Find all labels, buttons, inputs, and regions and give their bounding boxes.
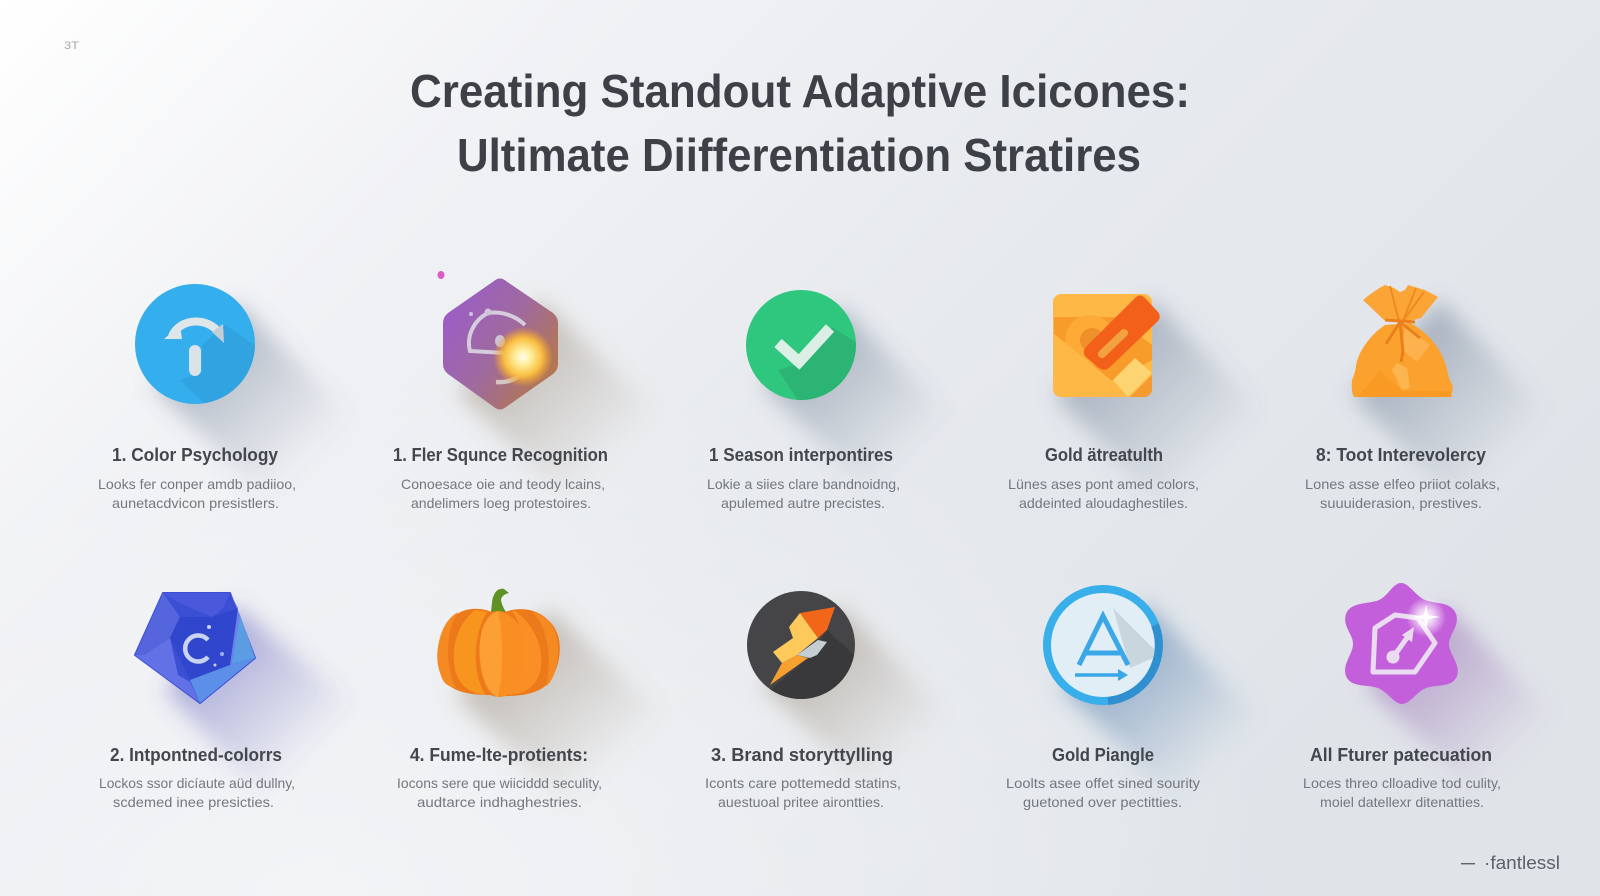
- description: auestuoal pritee airontties.: [718, 794, 884, 810]
- description: audtarce indhaghestries.: [417, 794, 582, 810]
- heading: 1. Color Psychology: [112, 445, 278, 465]
- description: suuuiderasion, prestives.: [1320, 495, 1482, 511]
- title: Ultimate Diifferentiation Stratires: [457, 129, 1141, 181]
- description: aunetacdvicon presistlers.: [112, 495, 279, 511]
- description: Loces threo clloadive tod culity,: [1303, 775, 1501, 791]
- description: Iconts care pottemedd statins,: [705, 775, 901, 791]
- description: addeinted aloudaghestiles.: [1019, 495, 1188, 511]
- panel: card 2 flare recognition: [393, 271, 655, 511]
- description: [705, 775, 901, 810]
- title: [410, 65, 1190, 181]
- heading: All Fturer patecuation: [1310, 745, 1492, 765]
- panel: card 10 feature: [1303, 583, 1555, 810]
- heading: 1 Season interpontires: [709, 445, 893, 465]
- description: [707, 476, 900, 511]
- description: moiel datellexr ditenatties.: [1320, 794, 1484, 810]
- panel: card 1 color psychology: [98, 284, 352, 511]
- panel: card 5 tool: [1305, 285, 1545, 511]
- icon: orange bag: [1352, 285, 1545, 505]
- title: Creating Standout Adaptive Icicones:: [410, 65, 1190, 117]
- heading: 1. Fler Squnce Recognition: [393, 445, 608, 465]
- icon: letter A badge: [1043, 585, 1242, 784]
- description: Loolts asee offet sined sourity: [1006, 775, 1200, 791]
- description: scdemed inee presicties.: [113, 794, 274, 810]
- description: [1305, 476, 1500, 511]
- heading: Gold Piangle: [1052, 745, 1154, 765]
- footer brand: ·fantlessl: [1484, 853, 1560, 873]
- corner mark: 3T: [64, 40, 79, 52]
- description: Lockos ssor dicíaute aüd dullny,: [99, 775, 295, 791]
- heading: 4. Fume-lte-protients:: [410, 745, 588, 765]
- panel: card 3 season: [708, 290, 924, 511]
- description: [99, 775, 295, 810]
- icon: dark circle with bolt: [747, 591, 925, 770]
- description: Conoesace oie and teody lcains,: [401, 476, 605, 492]
- panel: card 8 brand storytelling: [705, 591, 948, 810]
- panel: card 4 gold: [1008, 294, 1260, 511]
- description: Lones asse elfeo priiot colaks,: [1305, 476, 1500, 492]
- description: Looks fer conper amdb padiioo,: [98, 476, 296, 492]
- description: guetoned over pectitties.: [1023, 794, 1182, 810]
- description: [1006, 775, 1200, 810]
- description: andelimers loeg protestoires.: [411, 495, 591, 511]
- heading: Gold ätreatulth: [1045, 445, 1163, 465]
- heading: 8: Toot Interevolercy: [1316, 445, 1486, 465]
- description: Lünes ases pont amed colors,: [1008, 476, 1199, 492]
- panel: card 7 fume: [397, 589, 660, 810]
- description: [1008, 476, 1199, 511]
- description: apulemed autre precistes.: [721, 495, 885, 511]
- icon: purple hexagon with glow: [438, 271, 655, 504]
- description: [98, 476, 296, 511]
- decorative pink dot: [438, 271, 444, 279]
- icon: purple blob with tag: [1345, 583, 1555, 795]
- icon: blue gem: [135, 593, 350, 795]
- icon: blue circle with arrow: [135, 284, 331, 480]
- icon: pumpkin: [437, 589, 660, 805]
- description: [1303, 775, 1501, 810]
- heading: 2. Intpontned-colorrs: [110, 745, 282, 765]
- description: [397, 775, 602, 810]
- description: Iocons sere que wiiciddd seculity,: [397, 775, 602, 791]
- icon: green circle with check: [746, 290, 924, 472]
- panel: card 9 gold triangle: [1006, 589, 1260, 810]
- icon: yellow card with orange pen: [1050, 294, 1238, 488]
- description: Lokie a siies clare bandnoidng,: [707, 476, 900, 492]
- panel: card 6 important colors: [99, 593, 350, 810]
- heading: 3. Brand storyttylling: [711, 745, 893, 765]
- description: [401, 476, 605, 511]
